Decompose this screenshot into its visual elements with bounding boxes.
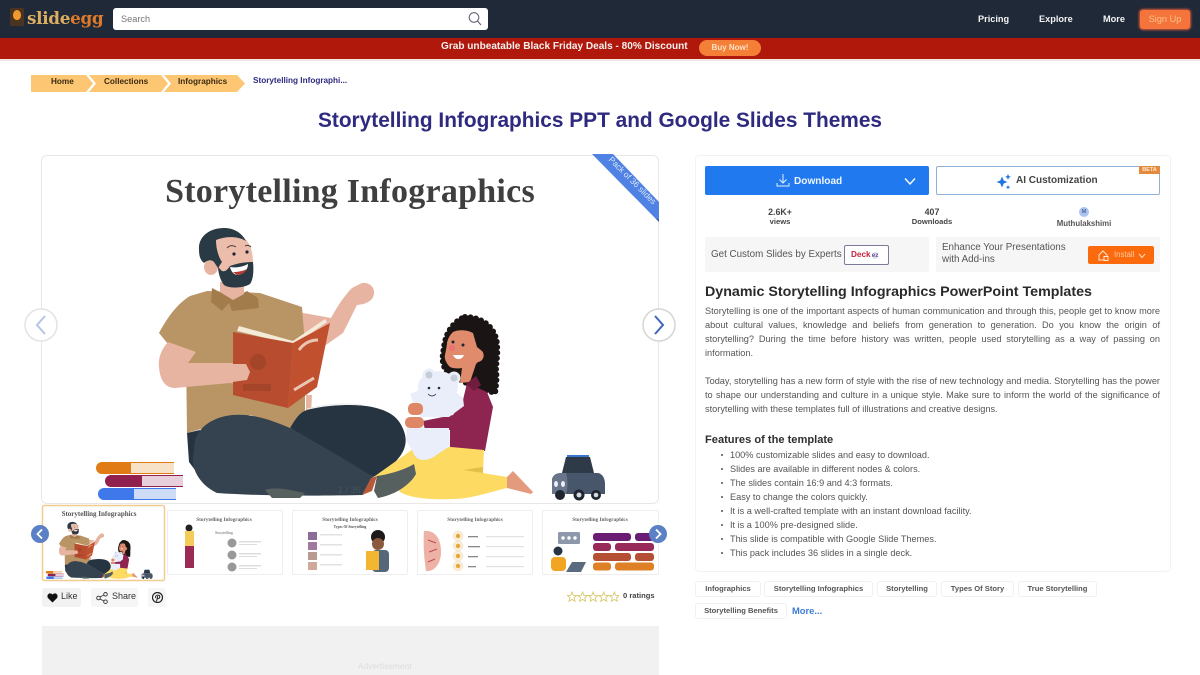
crumb current: Storytelling Infographi... [253,76,347,85]
nav: more: More [1103,14,1125,24]
stat: downloads: Downloads [912,217,952,226]
thumbnail 2: Storytelling Infographics [196,517,252,523]
thumbnail 4 [418,510,532,574]
description paragraph one: storytelling? During the time before history was written, people used storytelling as a way of passing on [705,334,1160,344]
stat: downloads: 407 [925,207,939,217]
description heading: Dynamic Storytelling Infographics PowerPoint Templates [705,284,1092,300]
nav: explore: Explore [1039,14,1073,24]
features list: It is a well-crafted template with an instant download facility. [730,506,972,516]
features heading: Features of the template [705,434,833,446]
slide heading: Storytelling Infographics [165,173,535,210]
add-ins promo: with Add-ins [942,254,995,265]
tags: Storytelling Infographics [774,584,863,593]
stat: views [768,207,792,226]
panel: main slide preview [41,155,659,504]
features list: Slides are available in different nodes & colors. [730,464,920,474]
tags: More... [792,605,822,616]
thumbnail 3: Types Of Storytelling [334,525,367,529]
arrow: next slide [642,308,676,342]
panel: download and details [695,155,1171,572]
custom slides promo: Get Custom Slides by Experts [711,249,842,260]
description paragraph one [705,306,1160,358]
like button: Like [61,591,78,601]
features list: This slide is compatible with Google Slide Themes. [730,534,936,544]
thumbnail 4: Storytelling Infographics [447,517,503,523]
stat: downloads [912,207,952,226]
ai customization button [936,166,1160,195]
advertisement placeholder [42,626,659,675]
stat: views: views [770,217,790,226]
star rating [567,591,619,602]
description paragraph one: Storytelling is one of the important aspects of human communication and through this, people get to know more [705,306,1160,316]
description paragraph two: storytelling with these templates full of illustrations and creative designs. [705,404,998,414]
custom slides promo: Deckez [851,250,878,259]
ribbon: pack of 36 slides [592,154,659,222]
thumbnail 3: Storytelling Infographics [322,517,378,523]
add-ins promo: Install [1114,250,1134,259]
crumb collections: Collections [104,77,148,86]
pinterest button [148,588,166,607]
download button: Download [794,176,842,186]
nav: pricing: Pricing [978,14,1009,24]
search box [113,8,488,30]
icon: slideegg logo mark [10,8,24,26]
description paragraph two: to shape our understanding and culture in a unique style. Make sure to inform the world of the significance of [705,390,1160,400]
promo banner [0,38,1200,59]
add-ins promo [936,237,1160,272]
stat: author [1057,207,1111,228]
share button: Share [112,591,136,601]
thumbnail 5 [542,510,658,574]
description paragraph two [705,376,1160,414]
crumb infographics: Infographics [178,77,227,86]
logo wordmark: slideegg [27,8,103,28]
promo text: Grab unbeatable Black Friday Deals - 80% Discount [441,41,688,52]
tags: Infographics [705,584,751,593]
sign up button: Sign Up [1149,14,1181,24]
stat: author: Muthulakshimi [1057,219,1111,228]
ratings count: 0 ratings [623,591,655,600]
sign up button [1140,10,1190,29]
arrow: thumbnails previous [31,525,49,543]
buy now button [699,40,761,56]
thumbnail 2: Storytelling [215,531,233,535]
advertisement placeholder: Advertisement [358,661,412,671]
tags: Types Of Story [951,584,1004,593]
arrow: thumbnails next [649,525,667,543]
share button [91,588,138,607]
stat: views: 2.6K+ [768,207,792,217]
ai customization button: BETA [1142,167,1157,173]
thumbnail 2 [168,510,282,574]
header bar [0,0,1200,38]
page title: Storytelling Infographics PPT and Google Slides Themes [318,109,882,132]
description paragraph two: Today, storytelling has a new form of style with the rise of new technology and media. Storytelling has the power [705,376,1160,386]
search box: Search [121,14,150,24]
description paragraph one: about cultural values, knowledge and beliefs from generation to generation. Do you know the origin of [705,320,1160,330]
crumb home: Home [51,77,74,86]
thumbnail 1 [42,506,164,580]
features list: This pack includes 36 slides in a single deck. [730,548,912,558]
download button [705,166,929,195]
ribbon: pack of 36 slides: Pack of 36 slides [607,154,659,206]
slide counter: 1 / 36 [338,485,361,495]
tags: Storytelling [886,584,928,593]
add-ins promo: Enhance Your Presentations [942,242,1066,253]
stat: author: M [1082,209,1086,215]
features list: It is a 100% pre-designed slide. [730,520,858,530]
features list: 100% customizable slides and easy to download. [730,450,930,460]
thumbnail 5: Storytelling Infographics [572,517,628,523]
thumbnail 1: Storytelling Infographics [62,510,137,518]
arrow: previous slide [24,308,58,342]
breadcrumb [31,75,347,92]
tags: True Storytelling [1028,584,1087,593]
custom slides promo [705,237,929,272]
thumbnail 3 [292,510,408,574]
tags: Storytelling Benefits [704,606,778,615]
features list: The slides contain 16:9 and 4:3 formats. [730,478,893,488]
like button [42,588,81,607]
ai customization button: AI Customization [1016,175,1098,186]
buy now button: Buy Now! [712,43,748,52]
features list: Easy to change the colors quickly. [730,492,868,502]
description paragraph one: information. [705,348,753,358]
